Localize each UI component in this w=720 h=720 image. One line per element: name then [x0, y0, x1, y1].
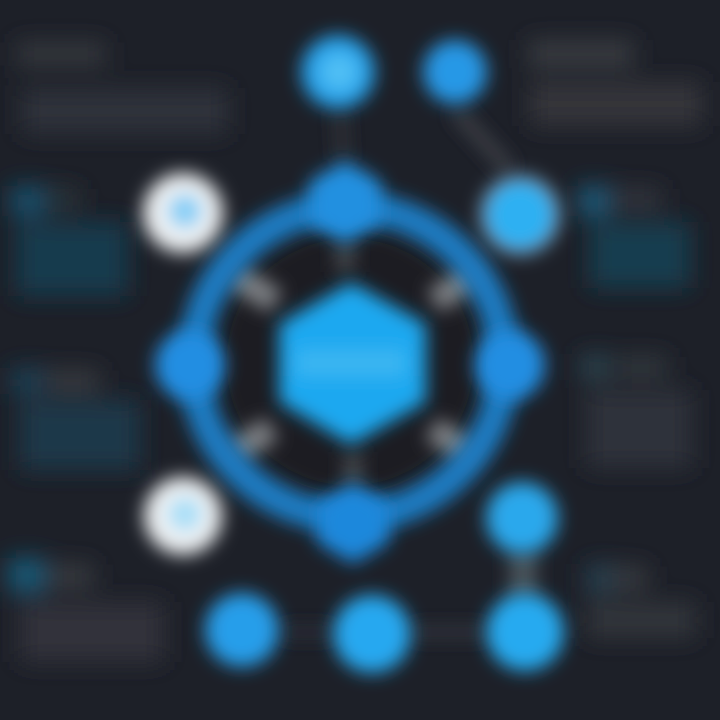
node: ring top [309, 160, 381, 244]
node: bottom circle one [205, 593, 279, 667]
node: top circle two [423, 40, 487, 104]
node: bottom circle three [486, 593, 564, 671]
text block: middle left upper [10, 186, 128, 296]
node: bottom right [486, 482, 558, 554]
text block: top left [16, 42, 228, 134]
text block: bottom right [586, 564, 696, 638]
text block: top right [528, 40, 702, 126]
node: bottom circle two [333, 595, 411, 673]
text block: bottom left [8, 558, 164, 662]
node: top circle one [301, 35, 375, 109]
node: ring left [155, 330, 225, 400]
text block: middle left lower [10, 368, 140, 470]
node: top right [479, 174, 561, 256]
text block: middle right lower [580, 354, 692, 468]
node: ring right [475, 330, 545, 400]
central hexagon [279, 282, 426, 445]
text block: middle right upper [578, 186, 690, 288]
node: bottom left white [144, 477, 222, 555]
node: ring bottom [317, 482, 389, 564]
network ring [194, 207, 504, 517]
connector lines: gray [232, 110, 523, 632]
node: top left white [143, 173, 223, 253]
ring interior shade [218, 230, 482, 494]
